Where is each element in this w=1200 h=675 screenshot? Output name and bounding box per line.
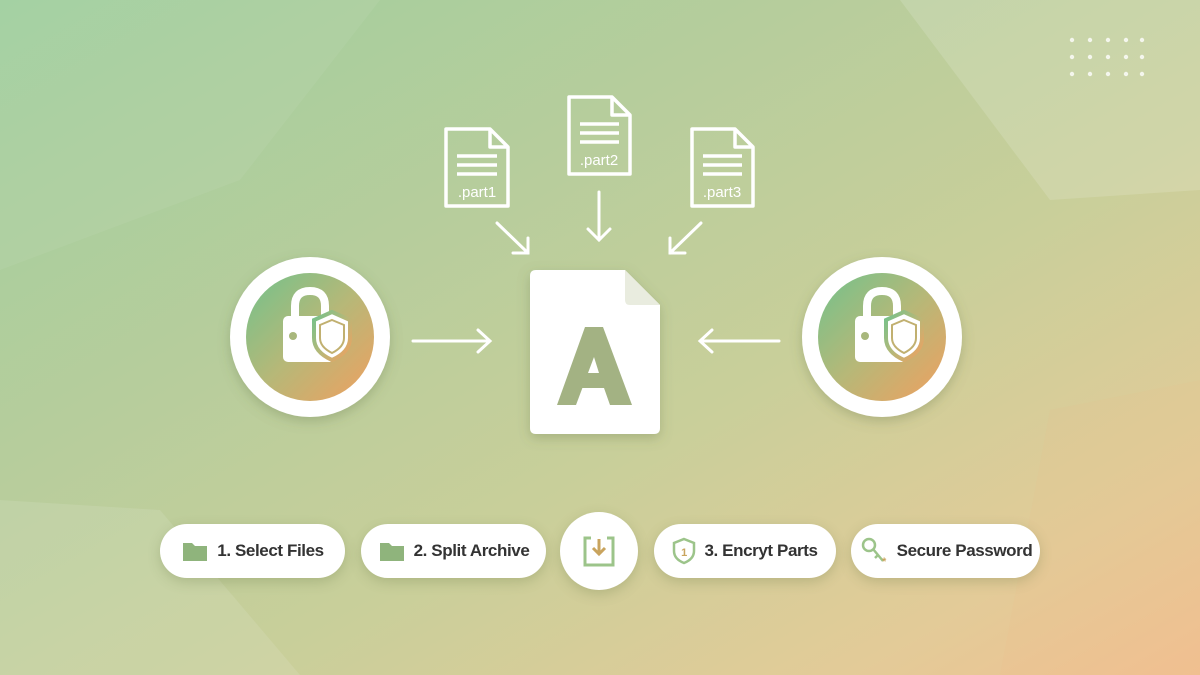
file icon: part1	[446, 129, 508, 206]
pill: split archive: 2. Split Archive	[414, 541, 529, 560]
pill: encrypt parts: 3. Encryt Parts	[704, 541, 818, 560]
arrow left to archive	[413, 330, 490, 352]
pill: secure password	[851, 524, 1040, 578]
arrow right to archive	[700, 330, 779, 352]
arrows from parts	[497, 192, 701, 253]
file icon: part2	[569, 97, 630, 174]
pill: select files: 1. Select Files	[217, 541, 324, 560]
lock circle right	[802, 257, 962, 417]
pill: split archive	[361, 524, 546, 578]
file icon: part2: .part2	[580, 152, 618, 169]
download circle	[560, 512, 638, 590]
pill: encrypt parts	[654, 524, 836, 578]
file icon: part3: .part3	[703, 184, 741, 201]
pill: secure password: Secure Password	[897, 541, 1032, 560]
lock circle left	[230, 257, 390, 417]
pill: select files	[160, 524, 345, 578]
pill: encrypt parts: 1	[682, 547, 688, 559]
file icon: part3	[692, 129, 753, 206]
archive file	[530, 270, 660, 434]
file icon: part1: .part1	[458, 184, 496, 201]
decorative dot grid	[1070, 38, 1144, 76]
